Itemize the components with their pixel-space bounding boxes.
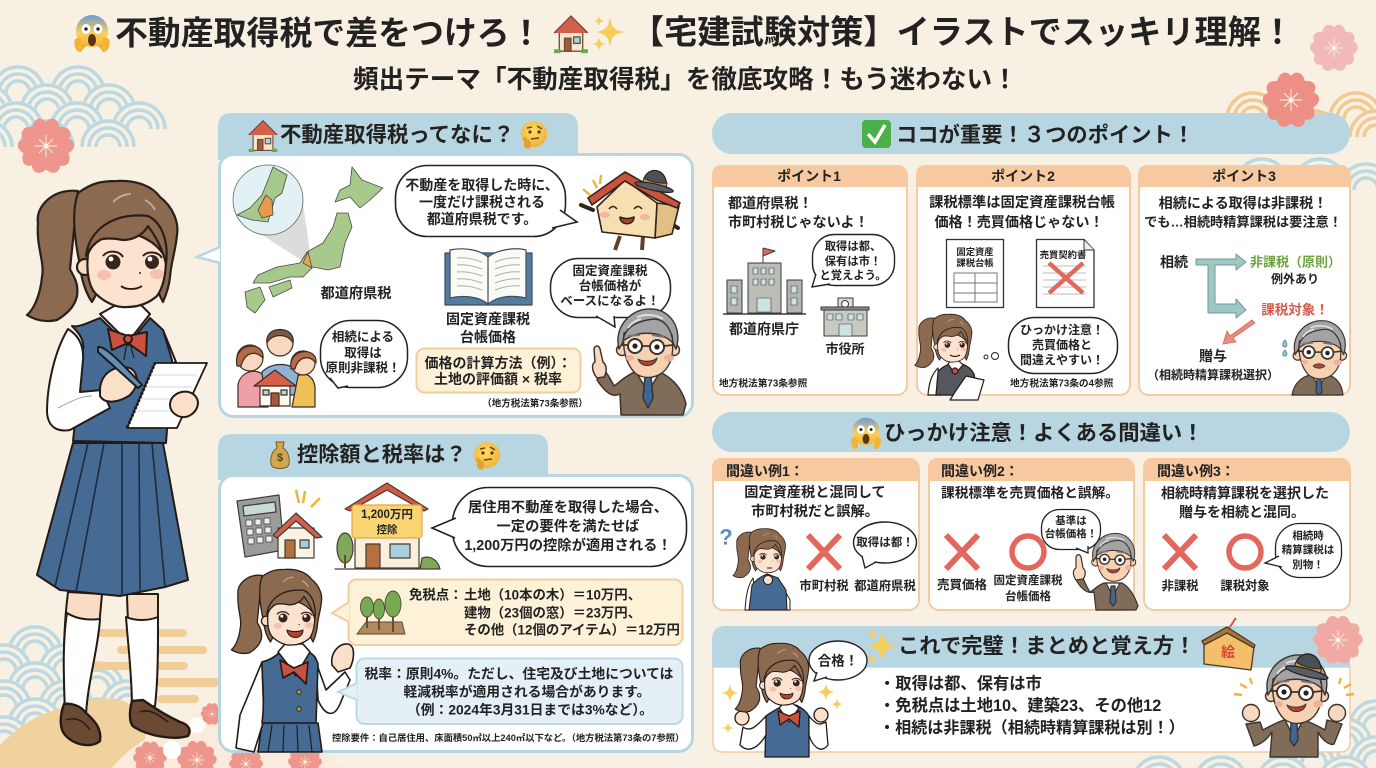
panel: common mistakes [712,412,1350,610]
thought bubble: trap warning [984,318,1118,374]
icon: house [554,16,588,51]
speech bubble: definition: 都道府県税です。 [427,211,537,227]
card: point 3 [1138,165,1350,395]
card: mistake 1: 固定資産税と混同して [744,484,886,501]
speech bubble: deduction: 一定の要件を満たせば [497,518,640,535]
callout: tax rate: 税率：原則4%。ただし、住宅及び土地については [365,666,674,682]
callout: price calculation [416,348,580,392]
icon: prefectural office [723,248,806,314]
icon: house with deduction sign: 1,200万円 [361,508,413,521]
heading text: 控除額と税率は？ [297,442,467,466]
speech bubble: definition: 不動産を取得した時に、 [405,177,559,193]
icon: screaming face [74,15,110,52]
icon: open ledger book [445,249,532,305]
card: point 2 [915,165,1130,400]
footnote: deduction requirements: 控除要件：自己居住用、床面積50㎡以上240㎡以下など。（地方税法第73条の7参照） [332,732,684,743]
icon: screaming face [851,418,881,449]
panel: deduction and tax rate [218,434,692,752]
speech bubble: base is ledger [1042,510,1100,553]
panel: what is real estate acquisition tax [197,113,692,416]
summary banner [712,626,1350,667]
book label [446,311,530,345]
map label: 都道府県税 [321,285,391,302]
subtitle: 頻出テーマ「不動産取得税」を徹底攻略！もう迷わない！ [353,65,1018,94]
icon: crossed-out sales contract: 売買契約書 [1040,249,1086,260]
banner text: ひっかけ注意！よくある間違い！ [884,421,1203,445]
card: point 1: ポイント1 [777,168,841,184]
title [74,14,1294,52]
speech bubble: acquisition vs holding: と覚えよう。 [819,268,887,282]
card: mistake 2 [928,458,1138,610]
card: mistake 1: 間違い例1： [726,463,804,479]
card: point 3: 例外あり [1271,271,1319,286]
speech bubble: inheritance [320,320,408,388]
icon: thinking face [521,121,547,149]
card: mistake 3: 非課税 [1162,578,1199,593]
card: point 1: 都道府県税！ [728,195,813,211]
card: mistake 1 [712,458,919,610]
character: standing student [27,181,207,745]
house character [581,167,680,250]
icon: sparkles [866,628,898,665]
character: teacher pointing [593,309,686,415]
card: point 3: 相続 [1160,254,1188,270]
card: point 3: ポイント3 [1212,168,1276,184]
card: point 3: 贈与 [1199,348,1227,364]
character: cheering teacher [1234,649,1354,757]
summary body [713,667,1350,752]
flow arrows [1196,254,1246,318]
heading tab [218,434,548,480]
icon: calculator and house [237,490,322,558]
callout: tax-free thresholds: 土地（10本の木）＝10万円、 [464,586,641,602]
card: point 2: 地方税法第73条の4参照 [1010,376,1114,390]
family with house [236,330,316,407]
card: mistake 1: 都道府県税 [854,578,916,593]
heading tab [218,113,578,160]
card: mistake 3: 間違い例3： [1157,463,1235,479]
speech bubble: ledger base: 固定資産課税 [572,263,648,278]
icon: green check [862,120,891,148]
citation: （地方税法第73条参照） [482,398,588,410]
character: confused student: ? [719,524,733,550]
panel: three key points [712,113,1350,400]
summary bullets: ・免税点は土地10、建築23、その他12 [879,696,1161,715]
speech bubble: acquisition is prefecture: 取得は都！ [856,535,914,549]
icon: red circle [1012,536,1044,568]
callout: tax-free thresholds: その他（12個のアイテム）＝12万円 [464,622,680,638]
card: point 2: 価格！売買価格じゃない！ [934,214,1104,230]
japan map [233,165,383,313]
character: cheering student [735,643,828,757]
speech bubble: settlement tax separate: 精算課税は [1282,543,1335,556]
speech bubble: ledger base: 台帳価格が [579,278,642,293]
character: student with fist [231,569,354,752]
title text 2: 【宅建試験対策】イラストでスッキリ理解！ [631,14,1294,52]
card: mistake 2: 売買価格 [937,577,987,592]
speech bubble: ledger base [550,258,670,327]
speech bubble: acquisition is prefecture [854,522,916,568]
banner [712,412,1350,452]
heading text: 不動産取得税ってなに？ [280,123,514,147]
card: mistake 3 [1143,458,1350,610]
card: point 1: 都道府県庁 [729,321,799,337]
summary bullets [879,674,1185,737]
speech bubble: inheritance: 原則非課税！ [325,360,401,375]
summary bullets: ・相続は非課税（相続時精算課税は別！） [879,718,1185,737]
speech bubble: base is ledger: 台帳価格！ [1045,527,1097,540]
speech bubble: acquisition vs holding: 保有は市！ [825,254,881,268]
icon: ledger document: 課税台帳 [956,257,994,268]
card: mistake 2: 固定資産課税 [994,573,1063,587]
card: point 3: 課税対象！ [1261,302,1329,318]
arrow: to gift [1223,320,1255,344]
speech bubble: deduction [432,488,686,566]
icon: ledger document: 固定資産 [956,246,994,257]
speech bubble: inheritance: 取得は [344,345,382,360]
card: point 3: （相続時精算課税選択） [1147,367,1279,382]
speech bubble: ledger base: ベースになるよ！ [560,294,660,308]
icon: ledger document [946,240,1004,308]
speech bubble: definition [396,166,577,236]
panel: summary [712,616,1365,757]
speech bubble: settlement tax separate: 相続時 [1292,529,1324,542]
card: mistake 3: 相続時精算課税を選択した [1161,485,1329,501]
speech tail to student [197,247,220,263]
callout: tax rate [338,658,682,724]
thought bubble: trap warning: 間違えやすい！ [1020,352,1104,367]
card: mistake 2: 台帳価格 [1005,589,1051,603]
speech bubble: settlement tax separate [1265,524,1342,578]
summary bullets: ・取得は都、保有は市 [879,674,1042,693]
icon: thinking face [474,442,500,470]
speech bubble: pass [809,641,867,681]
icon: house with deduction sign: 控除 [376,523,398,536]
icon: money bag [271,442,289,468]
callout: price calculation: 価格の計算方法（例）： [424,355,572,371]
decorative cherry blossom top right [1261,73,1321,130]
icon: ema plaque: 絵 [1221,644,1235,660]
speech bubble: inheritance: 相続による [332,329,394,344]
card: point 3: 相続による取得は非課税！ [1159,195,1327,211]
callout: tax-free thresholds [332,580,682,645]
card: mistake 2: 間違い例2： [941,463,1019,479]
icon: ema plaque [1202,618,1255,670]
speech bubble: deduction: 居住用不動産を取得した場合、 [468,498,668,516]
card: mistake 2: 課税標準を売買価格と誤解。 [941,484,1119,500]
card: point 2: ポイント2 [991,168,1055,184]
card: mistake 3: 贈与を相続と混同。 [1179,504,1305,520]
card: mistake 3: 課税対象 [1220,578,1270,593]
character: teacher pointing [1073,533,1138,610]
speech bubble: definition: 一度だけ課税される [419,194,545,210]
speech bubble: acquisition vs holding: 取得は都、 [825,239,881,253]
icon: city hall [821,298,869,336]
icon: money bag: $ [277,452,283,464]
icon: house with deduction sign [335,483,440,569]
speech bubble: settlement tax separate: 別物！ [1292,558,1324,571]
card: point 1: 市役所 [825,342,865,356]
decorative cherry blossom [1311,616,1365,667]
speech bubble: base is ledger: 基準は [1055,514,1087,527]
speech bubble: pass: 合格！ [818,652,858,668]
thresholds text: 免税点： [409,586,463,602]
character: confused student [719,524,790,610]
banner text: ココが重要！３つのポイント！ [896,122,1194,147]
card: mistake 1: 市町村税だと誤解。 [751,503,879,520]
card: point 1: 市町村税じゃないよ！ [728,214,869,230]
callout: price calculation: 土地の評価額 × 税率 [434,371,562,387]
character: student with notepad [915,314,984,400]
icon: heading house [249,121,277,150]
card: mistake 1: 市町村税 [799,578,849,593]
callout: tax rate: 軽減税率が適用される場合があります。 [404,684,650,700]
book label: 固定資産課税 [446,311,530,327]
icon: crossed-out sales contract [1036,240,1094,308]
panel body [220,154,692,416]
banner text: これで完璧！まとめと覚え方！ [898,634,1196,658]
banner [712,113,1350,154]
callout: tax-free thresholds: 建物（23個の窓）＝23万円、 [464,604,641,620]
thought bubble: trap warning: 売買価格と [1032,337,1092,352]
callout: tax rate: （例：2024年3月31日までは3%など）。 [407,702,653,718]
icon: trees [357,591,405,634]
icon: sparkles [592,16,625,51]
card: point 3: 非課税（原則） [1250,254,1341,270]
icon: sparkle accents [721,683,843,734]
title text 1: 不動産取得税で差をつけろ！ [115,14,543,52]
card: point 1 [712,165,907,395]
card: point 2: 課税標準は固定資産課税台帳 [929,193,1116,211]
card: point 1: 地方税法第73条参照 [719,376,808,390]
speech bubble: acquisition vs holding [812,234,894,287]
speech bubble: deduction: 1,200万円の控除が適用される！ [464,536,672,554]
character: worried teacher [1283,321,1347,395]
book label: 台帳価格 [460,329,516,345]
icon: red circle [1229,536,1261,568]
card: point 3: でも…相続時精算課税は要注意！ [1144,214,1342,230]
thought bubble: trap warning: ひっかけ注意！ [1020,322,1104,337]
panel body [220,476,692,752]
